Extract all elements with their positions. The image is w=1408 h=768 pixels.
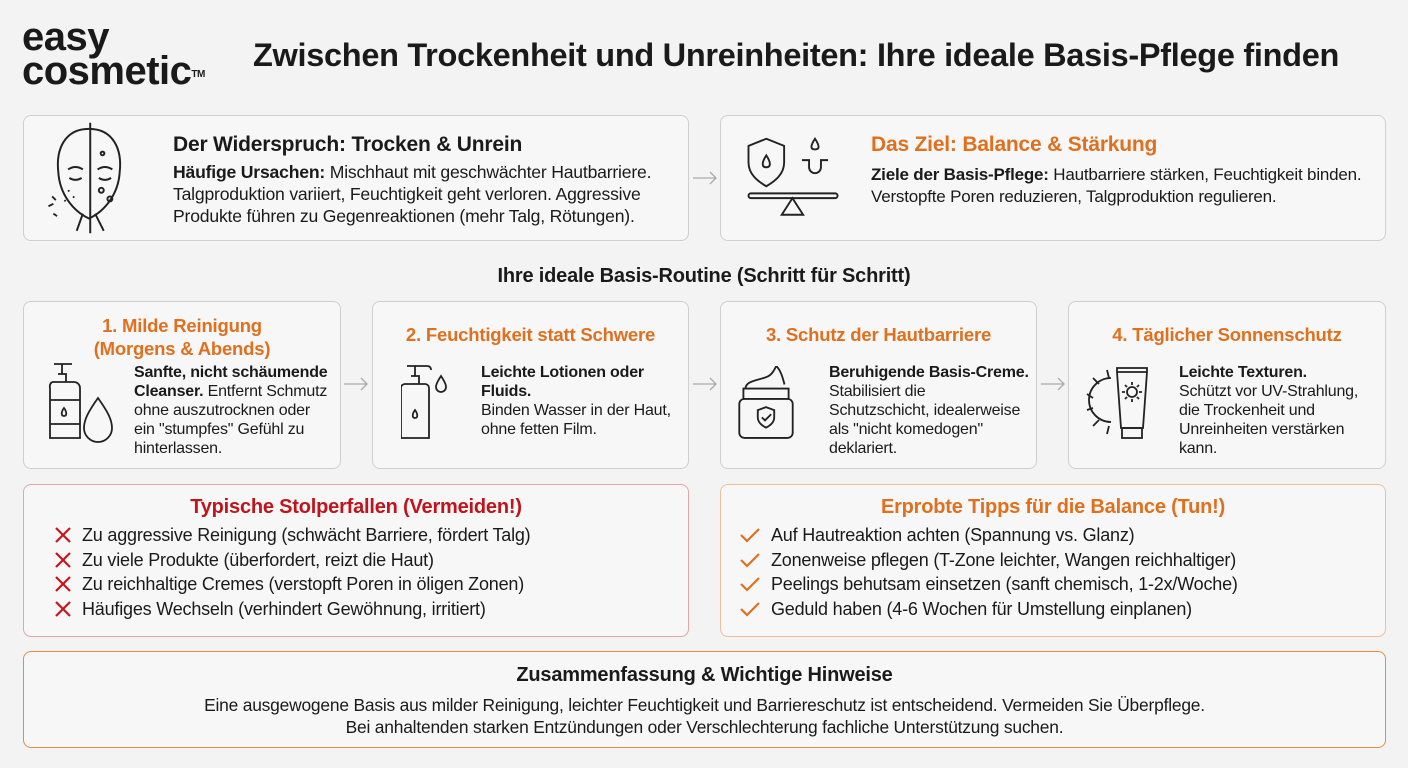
subheading: Ihre ideale Basis-Routine (Schritt für Schritt) — [498, 265, 910, 287]
logo — [22, 15, 205, 93]
arrow — [344, 378, 368, 390]
panel: summary — [23, 651, 1386, 748]
icon: cleanser — [48, 363, 113, 443]
step 1 — [23, 301, 341, 469]
text: Ziele der Basis-Pflege: Hautbarriere stärken, Feuchtigkeit binden. Verstopfte Poren reduzieren, Talgproduktion regulieren. — [871, 165, 1361, 206]
text: Schützt vor UV-Strahlung, die Trockenheit und Unreinheiten verstärken kann. — [1179, 383, 1358, 457]
step 1: 1. Milde Reinigung — [102, 315, 262, 336]
text: Binden Wasser in der Haut, ohne fetten Film. — [481, 402, 671, 438]
list: Zonenweise pflegen (T-Zone leichter, Wangen reichhaltiger) — [771, 550, 1236, 570]
step 4 — [1068, 301, 1386, 469]
step 2 — [372, 301, 689, 469]
list: Auf Hautreaktion achten (Spannung vs. Glanz) — [771, 525, 1134, 545]
list: Peelings behutsam einsetzen (sanft chemisch, 1-2x/Woche) — [771, 574, 1238, 594]
list: Zu aggressive Reinigung (schwächt Barriere, fördert Talg) — [82, 525, 530, 545]
title: Zwischen Trockenheit und Unreinheiten: Ihre ideale Basis-Pflege finden — [253, 37, 1339, 73]
arrow — [693, 172, 717, 184]
text: Häufige Ursachen: Mischhaut mit geschwächter Hautbarriere. Talgproduktion variiert, Feuchtigkeit geht verloren. Aggressive Produkte führen zu Gegenreaktionen (mehr Talg, Rötungen). — [173, 162, 651, 226]
icon: lotion — [401, 365, 447, 439]
text: Bei anhaltenden starken Entzündungen oder Verschlechterung fachliche Unterstützung suchen. — [346, 717, 1063, 737]
arrow — [1041, 378, 1065, 390]
heading: Das Ziel: Balance & Stärkung — [871, 133, 1157, 156]
icon: face — [48, 122, 122, 234]
step 3 — [720, 301, 1037, 469]
list: Zu reichhaltige Cremes (verstopft Poren in öligen Zonen) — [82, 574, 524, 594]
panel: tips — [720, 484, 1386, 637]
icon: balance — [748, 137, 838, 216]
text: Eine ausgewogene Basis aus milder Reinigung, leichter Feuchtigkeit und Barriereschutz ist entscheidend. Vermeiden Sie Überpflege. — [204, 695, 1205, 715]
panel: pitfalls — [23, 484, 689, 637]
text — [481, 364, 671, 438]
list — [740, 525, 1238, 619]
panel: goal — [720, 115, 1386, 241]
arrow — [693, 378, 717, 390]
list — [55, 525, 530, 619]
text — [204, 695, 1205, 737]
list: Häufiges Wechseln (verhindert Gewöhnung, irritiert) — [82, 598, 486, 618]
text: Leichte Texturen. — [1179, 364, 1307, 381]
logo: easy — [22, 15, 109, 59]
icon: sun and tube — [1086, 367, 1148, 439]
text: Beruhigende Basis-Creme. Stabilisiert die Schutzschicht, idealerweise als "nicht komedogen" deklariert. — [829, 364, 1029, 457]
panel: contradiction — [23, 115, 689, 241]
text: Sanfte, nicht schäumende Cleanser. Entfernt Schmutz ohne auszutrocknen oder ein "stumpfes" Gefühl zu hinterlassen. — [134, 364, 327, 457]
step 1: (Morgens & Abends) — [94, 338, 270, 359]
list: Zu viele Produkte (überfordert, reizt die Haut) — [82, 550, 434, 570]
step 2: 2. Feuchtigkeit statt Schwere — [406, 324, 655, 345]
step 3: 3. Schutz der Hautbarriere — [766, 324, 991, 345]
icon: cream jar — [738, 366, 794, 439]
text: Leichte Lotionen oder Fluids. — [481, 364, 644, 400]
step 4: 4. Täglicher Sonnenschutz — [1112, 324, 1342, 345]
logo: cosmeticTM — [22, 49, 205, 93]
heading: Der Widerspruch: Trocken & Unrein — [173, 133, 522, 156]
heading: Erprobte Tipps für die Balance (Tun!) — [881, 496, 1225, 518]
list: Geduld haben (4-6 Wochen für Umstellung einplanen) — [771, 598, 1192, 618]
heading: Typische Stolperfallen (Vermeiden!) — [190, 496, 522, 518]
heading: Zusammenfassung & Wichtige Hinweise — [516, 664, 893, 686]
